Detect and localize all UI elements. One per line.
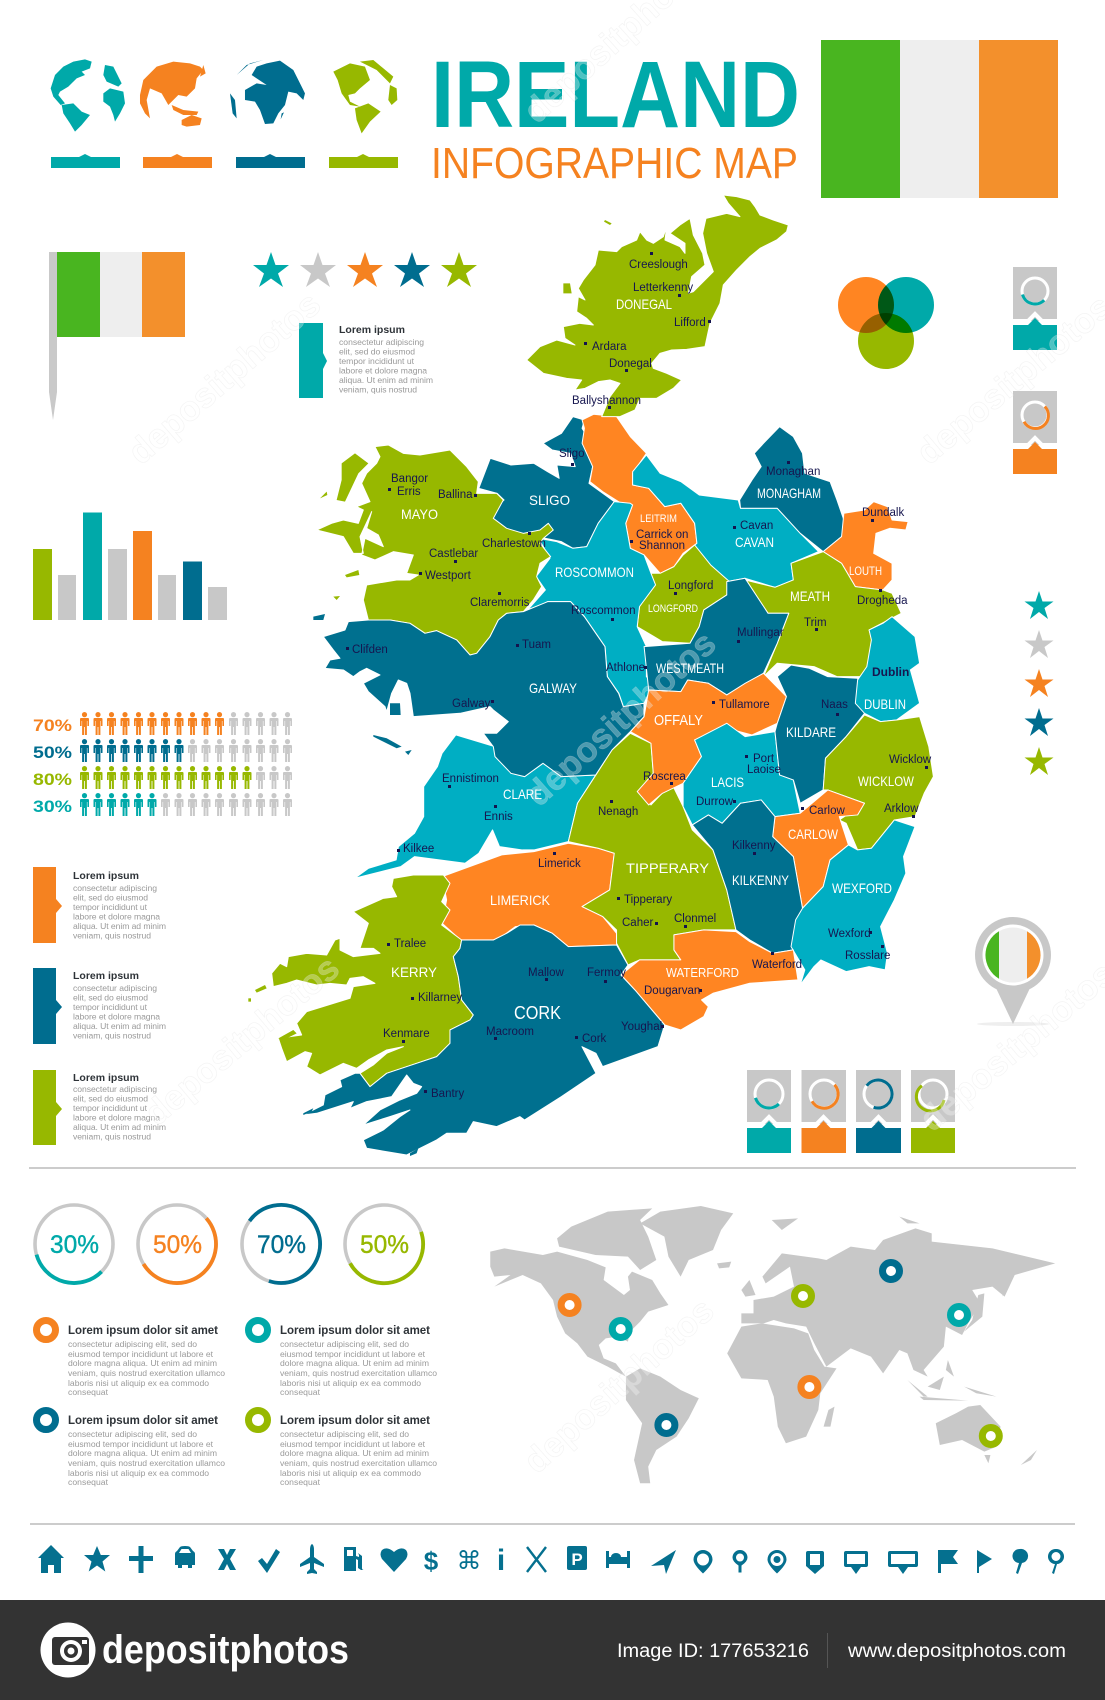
legend item: teal: eiusmod tempor incididunt ut labore et [280, 1349, 426, 1359]
ring: 30% [35, 1205, 113, 1283]
ring: 50% green [345, 1205, 423, 1283]
city labels: Creeslough [629, 259, 688, 271]
text block: orange note: Lorem ipsum [73, 870, 139, 882]
world map [490, 1206, 1055, 1483]
divider [30, 1523, 1075, 1525]
city labels: Mullingar [737, 627, 784, 639]
islands [248, 220, 612, 1156]
city labels: Donegal [609, 358, 652, 370]
county labels: CARLOW [788, 826, 839, 842]
city labels: Tuam [522, 639, 551, 651]
city labels: Caher [622, 917, 653, 929]
icon: plane [300, 1544, 324, 1574]
county: Meath [745, 552, 901, 677]
text block: green note: tempor incididunt ut [73, 1103, 148, 1113]
text block: green note: Lorem ipsum [73, 1072, 139, 1084]
watermarks: depositphotos [518, 624, 724, 814]
city labels: Mallow [528, 967, 564, 979]
city labels: Ballyshannon [572, 395, 641, 407]
stars column [1024, 591, 1054, 775]
divider [29, 1167, 1076, 1169]
map location pins [561, 1262, 999, 1444]
icon: parking [567, 1546, 587, 1570]
city labels: Ennistimon [442, 773, 499, 785]
city labels: Arklow [884, 803, 919, 815]
text block: green note: veniam, quis nostrud [73, 1132, 151, 1142]
globe: teal [51, 59, 125, 132]
globe: green [333, 60, 397, 133]
text block: blue note: veniam, quis nostrud [73, 1030, 151, 1040]
icon: pin target [768, 1550, 786, 1574]
city labels: Waterford [752, 959, 802, 971]
county: Offaly [630, 673, 786, 805]
text block: orange note: veniam, quis nostrud [73, 930, 151, 940]
county: Kerry [272, 875, 473, 1087]
county labels: CORK [514, 1003, 561, 1023]
text block: green note: elit, sed do eiusmod [73, 1094, 148, 1104]
county: Kilkenny [692, 800, 803, 953]
row: 70%: 70% [33, 716, 72, 735]
globes row [51, 59, 397, 133]
city labels: Westport [425, 570, 472, 582]
city labels: Carrick on [636, 529, 688, 541]
flag: on pole [49, 252, 185, 420]
county labels: GALWAY [529, 680, 578, 696]
county: Wicklow [823, 715, 933, 850]
watermarks: depositphotos [121, 284, 328, 472]
icon: car [175, 1546, 195, 1568]
county: Mayo [317, 445, 553, 655]
county: Donegal [527, 195, 788, 417]
city labels: Drogheda [857, 595, 908, 607]
legend item: green [248, 1410, 437, 1487]
county labels: MAYO [401, 506, 438, 522]
legend item: blue: dolore magna aliqua. Ut enim ad minim [68, 1448, 217, 1458]
text block: blue note: labore et dolore magna [73, 1012, 160, 1022]
city dots [346, 252, 928, 1093]
watermarks: depositphotos [516, 1291, 722, 1481]
icon: star [84, 1546, 110, 1572]
city labels: Kilkenny [732, 840, 776, 852]
legend item: orange: consequat [68, 1387, 109, 1397]
county: Sligo [479, 417, 614, 548]
city labels: Ballina [438, 489, 473, 501]
city labels: Fermoy [587, 967, 626, 979]
county: Kildare [775, 665, 865, 803]
city labels: Roscrea [643, 771, 686, 783]
inland and eastern counties [355, 414, 933, 1030]
icon: magnifier pin [1048, 1549, 1064, 1574]
text block: blue note: consectetur adipiscing [73, 983, 157, 993]
title: IRELAND [431, 42, 800, 148]
county labels: MONAGHAM [757, 485, 821, 501]
city labels: Youghal [621, 1021, 662, 1033]
city labels: Athlone [606, 662, 645, 674]
county: Louth [823, 502, 908, 590]
county: Monaghan [740, 427, 846, 552]
legend item: orange: Lorem ipsum dolor sit amet [68, 1325, 218, 1337]
globe: dark blue [230, 60, 305, 124]
county labels: LACIS [711, 774, 744, 790]
legend item: green: veniam, quis nostrud exercitation ullamco [280, 1458, 437, 1468]
ring: 70%: 70% [257, 1231, 306, 1259]
people chart [33, 712, 292, 816]
text block: orange note: elit, sed do eiusmod [73, 892, 148, 902]
panel: top right orange ring [1013, 391, 1057, 474]
globe label bars [51, 154, 398, 168]
county labels: LONGFORD [648, 603, 698, 615]
legend item: blue: Lorem ipsum dolor sit amet [68, 1415, 218, 1427]
city labels: Bantry [431, 1088, 464, 1100]
bar chart [33, 512, 227, 620]
county labels: WICKLOW [858, 773, 915, 789]
icon: bed [606, 1551, 630, 1568]
county: Wexford [791, 820, 915, 985]
icon: parking: P [571, 1550, 583, 1569]
flag: large [821, 40, 1058, 198]
legend item: green: laboris nisi ut aliquip ex ea commodo [280, 1468, 421, 1478]
county labels: CLARE [503, 786, 542, 802]
city labels: Tipperary [624, 894, 672, 906]
county: Cork [303, 925, 665, 1155]
city labels: Cork [582, 1033, 607, 1045]
row: 50% [33, 739, 292, 762]
text block: blue note: aliqua. Ut enim ad minim [73, 1021, 166, 1031]
county labels: LOUTH [849, 564, 882, 578]
icon: plus [129, 1546, 153, 1573]
legend item: blue: laboris nisi ut aliquip ex ea commodo [68, 1468, 209, 1478]
logo: wordmark: depositphotos [102, 1628, 349, 1672]
text block: green note: aliqua. Ut enim ad minim [73, 1122, 166, 1132]
footer separator [827, 1633, 828, 1668]
text block: blue note: tempor incididunt ut [73, 1002, 148, 1012]
text block: teal note: veniam, quis nostrud [339, 384, 417, 394]
city labels [352, 259, 932, 1100]
county: Limerick [442, 843, 617, 947]
city labels: Tralee [394, 938, 426, 950]
county: Leitrim [582, 414, 697, 573]
globe: orange [140, 62, 206, 127]
legend item: green: dolore magna aliqua. Ut enim ad minim [280, 1448, 429, 1458]
legend item: orange: laboris nisi ut aliquip ex ea commodo [68, 1378, 209, 1388]
icon: navigation arrow [651, 1550, 676, 1574]
text block: teal note: labore et dolore magna [339, 366, 427, 376]
icon: check [258, 1549, 280, 1573]
website url: www.depositphotos.com [847, 1641, 1066, 1662]
city labels: Dougarvan [644, 985, 700, 997]
legend item: orange: consectetur adipiscing elit, sed do [68, 1339, 197, 1349]
legend item: teal: consectetur adipiscing elit, sed do [280, 1339, 409, 1349]
legend item: green: Lorem ipsum dolor sit amet [280, 1415, 430, 1427]
county: Waterford [621, 930, 798, 1030]
city labels: Limerick [538, 858, 581, 870]
city labels: Trim [804, 617, 827, 629]
row: 70% [33, 712, 292, 735]
county labels: SLIGO [529, 492, 570, 508]
text block: teal note: Lorem ipsum [339, 324, 405, 336]
city labels: Cavan [740, 520, 773, 532]
city labels: Carlow [809, 805, 845, 817]
text block: green note: labore et dolore magna [73, 1112, 160, 1122]
city labels: Erris [397, 486, 421, 498]
county: Lacis [683, 723, 800, 825]
panel: teal ring [747, 1070, 791, 1153]
county: Galway [323, 602, 644, 777]
legend item: teal [248, 1320, 437, 1397]
legend item: orange: eiusmod tempor incididunt ut labore et [68, 1349, 214, 1359]
text block: orange note: labore et dolore magna [73, 912, 160, 922]
icon: dollar: $ [424, 1546, 439, 1576]
city labels: Charlestown [482, 538, 546, 550]
legend item: teal: dolore magna aliqua. Ut enim ad minim [280, 1358, 429, 1368]
icon: info: i [497, 1544, 505, 1577]
text block: orange note [33, 867, 166, 943]
city labels: Port [753, 753, 775, 765]
panel: top right teal ring [1013, 267, 1057, 350]
legend item: orange: veniam, quis nostrud exercitation ullamco [68, 1368, 225, 1378]
map of Ireland [248, 195, 933, 1156]
county labels: DONEGAL [616, 296, 672, 312]
text block: blue note: elit, sed do eiusmod [73, 992, 148, 1002]
county labels: OFFALY [654, 712, 703, 729]
icon: heart [380, 1548, 408, 1572]
ring: 70% [242, 1205, 320, 1283]
city labels: Dublin [872, 665, 909, 679]
icon: wide bubble [888, 1551, 918, 1574]
city labels: Galway [452, 698, 491, 710]
city labels: Letterkenny [633, 282, 693, 294]
city labels: Claremorris [470, 597, 530, 609]
text block: teal note: consectetur adipiscing [339, 337, 424, 347]
city labels: Longford [668, 580, 713, 592]
watermarks: depositphotos [137, 948, 347, 1133]
county labels: LIMERICK [490, 892, 551, 908]
county labels: KILDARE [786, 724, 836, 740]
legend item: orange: dolore magna aliqua. Ut enim ad minim [68, 1358, 217, 1368]
legend item: green: consequat [280, 1477, 321, 1487]
row: 80%: 80% [33, 770, 72, 789]
icon: command: ⌘ [456, 1546, 482, 1575]
city labels: Sligo [559, 448, 585, 460]
stars row [253, 252, 477, 287]
legend item: green: eiusmod tempor incididunt ut labore et [280, 1439, 426, 1449]
icon: pin ring [694, 1550, 712, 1574]
county: Westmeath [644, 578, 789, 695]
city labels: Kilkee [403, 843, 434, 855]
legend item: blue: veniam, quis nostrud exercitation ullamco [68, 1458, 225, 1468]
text block: green note [33, 1070, 166, 1145]
ring: 30%: 30% [50, 1231, 99, 1259]
city labels: Durrow [696, 796, 734, 808]
city labels: Kenmare [383, 1028, 430, 1040]
icon strip [38, 1544, 1064, 1577]
county labels: DUBLIN [864, 696, 906, 712]
city labels: Rosslare [845, 950, 890, 962]
legend item: blue: consequat [68, 1477, 109, 1487]
icon: cross [218, 1549, 236, 1570]
icon: fuel [344, 1547, 364, 1571]
ring: 50% orange: 50% [153, 1231, 202, 1259]
city labels: Killarney [418, 992, 462, 1004]
legend item: orange [36, 1320, 225, 1397]
city labels: Roscommon [571, 605, 636, 617]
county: Carlow [773, 790, 865, 908]
county labels: TIPPERARY [626, 860, 710, 876]
icon: pin small [732, 1550, 748, 1572]
text block: orange note: consectetur adipiscing [73, 883, 157, 893]
percent rings [35, 1205, 423, 1283]
text block: blue note: Lorem ipsum [73, 970, 139, 982]
ring: 50% orange [138, 1205, 216, 1283]
county labels: ROSCOMMON [555, 564, 634, 580]
logo: camera badge [40, 1622, 96, 1678]
row: 30%: 30% [33, 797, 72, 816]
text block: orange note: aliqua. Ut enim ad minim [73, 921, 166, 931]
city labels: Clonmel [674, 913, 716, 925]
city labels: Dundalk [862, 507, 904, 519]
county labels: KERRY [391, 964, 438, 980]
row: 50%: 50% [33, 743, 72, 762]
subtitle: INFOGRAPHIC MAP [431, 139, 798, 188]
city labels: Laoise [747, 764, 781, 776]
city labels: Wicklow [889, 754, 932, 766]
county labels: KILKENNY [732, 872, 790, 888]
county: Longford [637, 545, 731, 643]
county: Tipperary [568, 733, 736, 965]
city labels: Nenagh [598, 806, 638, 818]
legend item: teal: laboris nisi ut aliquip ex ea commodo [280, 1378, 421, 1388]
venn diagram [838, 277, 934, 369]
city labels: Monaghan [766, 466, 820, 478]
legend item: green: consectetur adipiscing elit, sed do [280, 1429, 409, 1439]
legend item: teal: Lorem ipsum dolor sit amet [280, 1325, 430, 1337]
ring: 50% green: 50% [360, 1231, 409, 1259]
city labels: Wexford [828, 928, 871, 940]
image id: Image ID: 177653216 [617, 1641, 809, 1662]
text block: green note: consectetur adipiscing [73, 1084, 157, 1094]
text block: teal note: tempor incididunt ut [339, 356, 415, 366]
row: 80% [33, 766, 292, 789]
text block: orange note: tempor incididunt ut [73, 902, 148, 912]
row: 30% [33, 793, 292, 816]
city labels: Ennis [484, 811, 513, 823]
city labels: Tullamore [719, 699, 770, 711]
county labels: MEATH [790, 588, 830, 604]
legend item: teal: consequat [280, 1387, 321, 1397]
legend item: teal: veniam, quis nostrud exercitation ullamco [280, 1368, 437, 1378]
icon: flag [938, 1550, 958, 1573]
watermarks [121, 0, 1105, 1481]
city labels: Lifford [674, 317, 706, 329]
city labels: Macroom [486, 1026, 534, 1038]
text block: teal note: elit, sed do eiusmod [339, 346, 415, 356]
city labels: Ardara [592, 341, 627, 353]
panel: green ring [911, 1070, 955, 1153]
icon: marker [806, 1551, 824, 1574]
county labels: CAVAN [735, 534, 774, 550]
city labels: Bangor [391, 473, 428, 485]
icon: pennant [977, 1550, 992, 1573]
text block: teal note [299, 323, 433, 398]
county: Cavan [633, 455, 819, 587]
icon: home [38, 1545, 64, 1573]
county labels: LEITRIM [640, 513, 677, 525]
text block: teal note: aliqua. Ut enim ad minim [339, 375, 433, 385]
county labels: WATERFORD [666, 965, 739, 980]
text block: blue note [33, 968, 166, 1044]
icon: round pin [1012, 1549, 1028, 1574]
icon: speech bubble [844, 1551, 868, 1574]
city labels: Clifden [352, 644, 388, 656]
county: Roscommon [525, 502, 656, 707]
legend item: blue [36, 1410, 225, 1487]
county labels: WEXFORD [832, 880, 892, 896]
ring panels row [747, 1070, 955, 1153]
legend item: blue: consectetur adipiscing elit, sed do [68, 1429, 197, 1439]
county labels [391, 296, 915, 1023]
legend item: blue: eiusmod tempor incididunt ut labore et [68, 1439, 214, 1449]
county: Clare [355, 735, 596, 878]
county: Dublin [855, 617, 920, 722]
panel: blue ring [856, 1070, 901, 1153]
panel: orange ring [802, 1070, 846, 1153]
footer bar [0, 1600, 1105, 1700]
city labels: Castlebar [429, 548, 478, 560]
city labels: Shannon [639, 540, 685, 552]
icon: fork and knife [527, 1547, 546, 1572]
city labels: Naas [821, 699, 848, 711]
map pin with flag [975, 917, 1051, 1026]
county labels: WESTMEATH [656, 660, 724, 676]
